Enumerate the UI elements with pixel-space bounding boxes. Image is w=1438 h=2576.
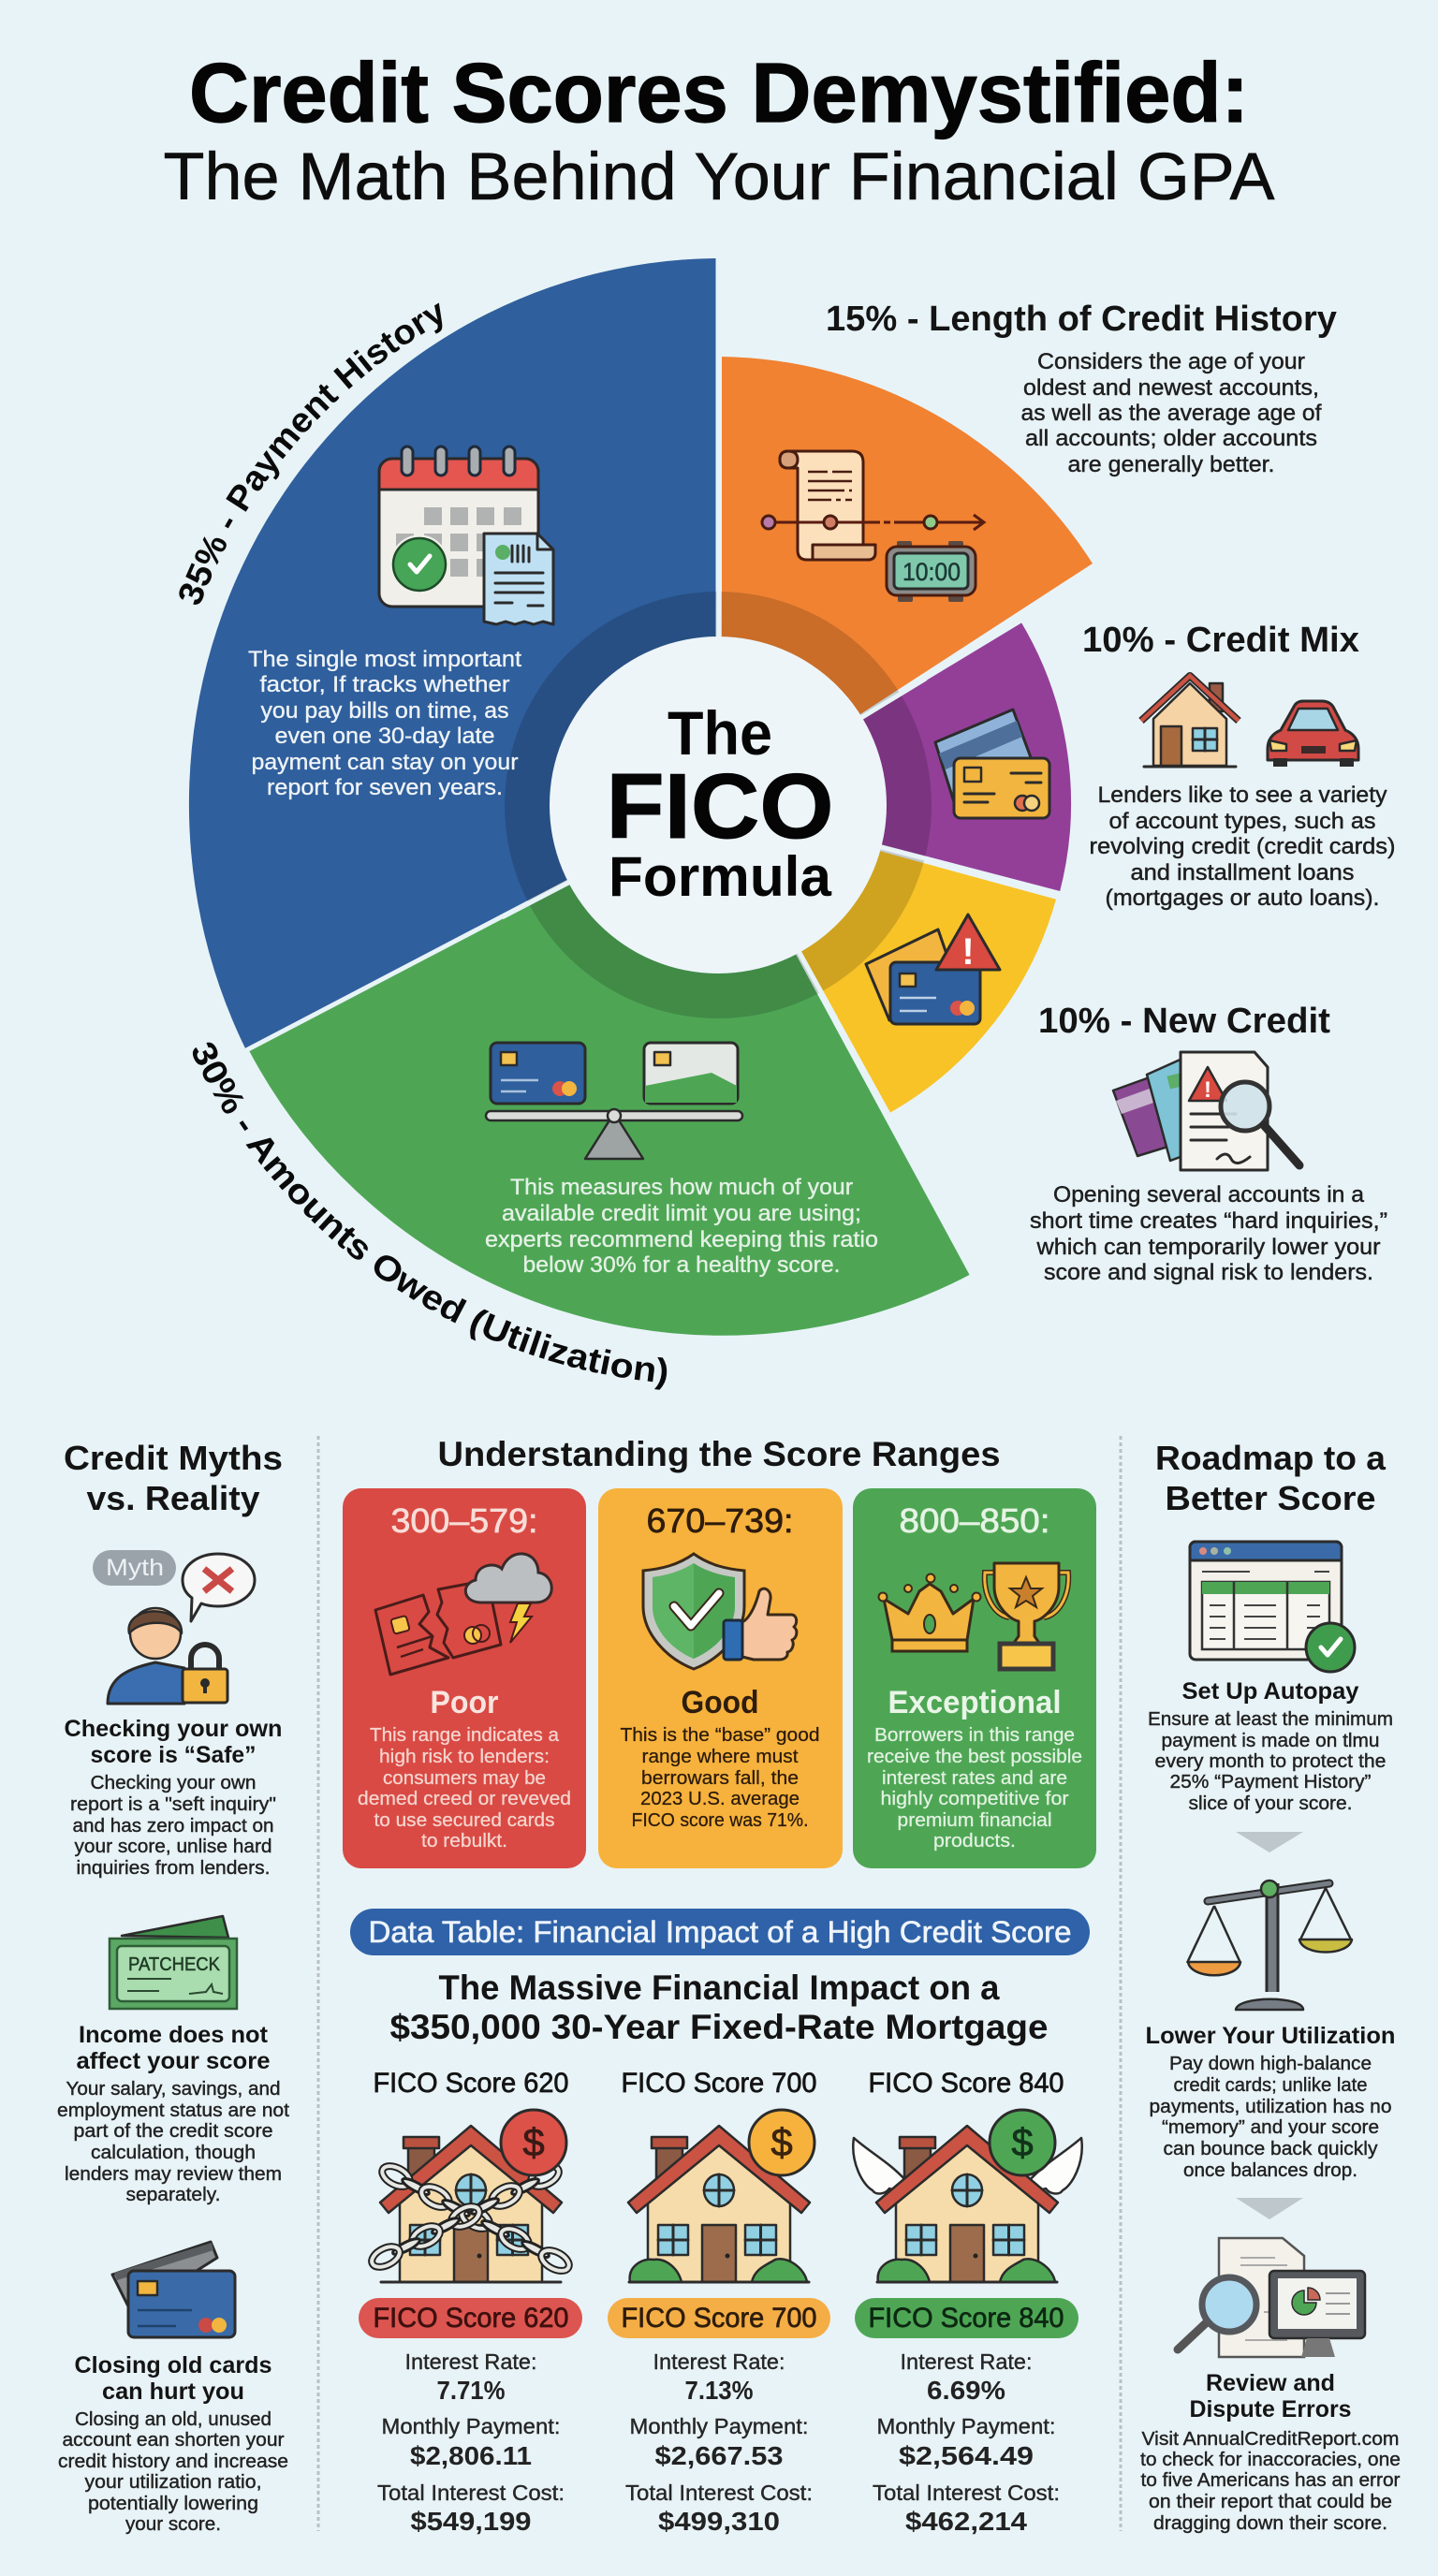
card: poor: consumers may be (383, 1768, 546, 1789)
heading (1155, 1439, 1387, 1517)
step 3: to five Americans has an error (1140, 2470, 1401, 2491)
panel: credit mix: (mortgages or auto loans). (1105, 886, 1380, 911)
pill (359, 2298, 582, 2338)
curved label: amounts owed: 30% - Amounts Owed (Utilization) (193, 1043, 667, 1390)
card: good: This is the “base” good (620, 1725, 820, 1746)
icon: scroll timeline clock: 10:00 (902, 558, 961, 586)
myth 2: lenders may review them (65, 2164, 282, 2185)
step 2: Lower Your Utilization (1146, 2023, 1395, 2049)
banner: data table: Data Table: Financial Impact of a High Credit Score (369, 1915, 1071, 1949)
icon: house with wings: $ (1011, 2120, 1034, 2164)
divider left (316, 1436, 320, 2531)
icon: credit cards purple (935, 710, 1049, 818)
pill (608, 2298, 830, 2338)
icon: documents with magnifier: ! (1204, 1077, 1211, 1103)
icon: myth person lock (93, 1550, 255, 1704)
panel: credit myths (57, 1439, 289, 2535)
center circle: FICO (607, 754, 833, 857)
card: good: berrowars fall, the (641, 1768, 799, 1789)
myth 3: potentially lowering (88, 2494, 258, 2514)
panel: credit mix: of account types, such as (1108, 809, 1376, 834)
myth 2: part of the credit score (73, 2121, 273, 2142)
card: poor: demed creed or reveved (358, 1789, 571, 1809)
metrics: Total Interest Cost: (873, 2481, 1060, 2505)
myth 3: your score. (125, 2514, 221, 2535)
column: FICO 620: FICO Score 620 (373, 2068, 569, 2099)
metrics: 6.69% (927, 2376, 1005, 2405)
metrics: 7.71% (436, 2376, 506, 2405)
card: poor: This range indicates a (370, 1725, 560, 1746)
card: exceptional: Borrowers in this range (874, 1725, 1075, 1746)
card: poor: to use secured cards (374, 1810, 554, 1831)
pill: FICO Score 700 (622, 2303, 816, 2334)
text: amounts owed: available credit limit you are using; (502, 1201, 861, 1226)
myth 1: and has zero impact on (73, 1816, 273, 1837)
title (163, 47, 1275, 214)
card: good: Good (682, 1685, 758, 1720)
inner dark ring (505, 592, 932, 1018)
panel: credit mix: 10% - Credit Mix (1082, 621, 1359, 660)
myth 1: Checking your own (90, 1773, 257, 1793)
icon: paycheck: PATCHECK (128, 1954, 221, 1975)
pill (855, 2298, 1078, 2338)
icon: house with coin: $ (770, 2120, 793, 2164)
step 2: once balances drop. (1183, 2160, 1357, 2181)
card: exceptional: interest rates and are (882, 1768, 1067, 1789)
icon: review documents (1178, 2238, 1365, 2357)
text: amounts owed: This measures how much of your (510, 1175, 853, 1200)
icon: documents with magnifier (1113, 1052, 1299, 1170)
card: good: range where must (642, 1747, 799, 1767)
metrics: Monthly Payment: (876, 2414, 1056, 2438)
heading: mortgage impact: $350,000 30-Year Fixed-Rate Mortgage (389, 2008, 1049, 2046)
metrics: Interest Rate: (901, 2349, 1032, 2374)
column: FICO 700 (608, 2068, 830, 2536)
panel: length of credit history: 15% - Length of Credit History (826, 300, 1337, 339)
heading: Credit Myths (64, 1439, 283, 1477)
icon: new credit cards warning (866, 915, 1000, 1024)
card: exceptional: 800–850: (899, 1501, 1050, 1540)
icon: scale with cards (486, 1043, 742, 1159)
myth 2 (57, 2022, 289, 2205)
myth 3: can hurt you (102, 2378, 244, 2405)
pill: FICO Score 620 (373, 2303, 569, 2334)
chart: FICO formula pie (179, 258, 1093, 1390)
myth 2: Your salary, savings, and (66, 2079, 281, 2100)
card: poor: Poor (431, 1685, 498, 1720)
panel: score ranges heading: Understanding the Score Ranges (438, 1435, 1000, 1473)
myth 2: Income does not (79, 2022, 269, 2048)
card: exceptional: premium financial (897, 1810, 1052, 1831)
curved label: payment history: 35% - Payment History (179, 303, 442, 605)
step 2: Pay down high-balance (1169, 2054, 1372, 2074)
center circle: The (668, 698, 772, 768)
heading: mortgage impact: The Massive Financial Impact on a (438, 1969, 1000, 2007)
metrics (377, 2349, 565, 2536)
column: FICO 700: FICO Score 700 (622, 2068, 816, 2099)
myth 3: your utilization ratio, (84, 2472, 262, 2493)
segment: credit mix (717, 620, 1074, 894)
icon: credit cards (112, 2242, 235, 2337)
step 2: “memory” and your score (1162, 2117, 1379, 2138)
myth 3: credit history and increase (58, 2452, 288, 2472)
text: payment history: payment can stay on your (251, 750, 519, 775)
panel: credit mix: revolving credit (credit cards) (1090, 834, 1395, 859)
myth 3: Closing an old, unused (75, 2409, 271, 2430)
myth 2: affect your score (77, 2048, 271, 2074)
text: payment history: The single most important (248, 647, 521, 672)
myth 1 (64, 1716, 283, 1879)
icon: shield and thumbs up (643, 1554, 797, 1669)
column: FICO 840 (853, 2068, 1082, 2536)
panel: length of credit history (826, 300, 1337, 477)
step 1: Ensure at least the minimum (1148, 1709, 1393, 1730)
icon: house with coin (628, 2110, 814, 2282)
card: poor: to rebulkt. (421, 1831, 507, 1852)
panel: length of credit history: Considers the age of your (1037, 349, 1305, 374)
heading (64, 1439, 283, 1517)
panel: credit mix: Lenders like to see a variety (1097, 783, 1387, 808)
segment: length of history (722, 357, 1093, 804)
heading: vs. Reality (86, 1479, 260, 1517)
metrics: $2,806.11 (410, 2441, 532, 2470)
text: amounts owed (485, 1175, 878, 1278)
panel: length of credit history: are generally better. (1067, 452, 1275, 477)
title: The Math Behind Your Financial GPA (163, 140, 1275, 214)
text: payment history: you pay bills on time, as (260, 698, 509, 724)
step 1: Set Up Autopay (1181, 1678, 1359, 1705)
arrow (1236, 2198, 1303, 2219)
icon: crown and trophy (878, 1563, 1068, 1669)
myth 3 (58, 2352, 288, 2535)
metrics (625, 2349, 813, 2536)
panel: new credit (1030, 1002, 1387, 1285)
icon: house (1141, 676, 1239, 767)
panel: length of credit history: all accounts; older accounts (1025, 426, 1317, 451)
metrics: 7.13% (685, 2376, 754, 2405)
card: poor: high risk to lenders: (379, 1747, 550, 1767)
icon: myth person lock: Myth (106, 1555, 164, 1581)
card: good (598, 1488, 843, 1868)
step 2: can bounce back quickly (1163, 2139, 1378, 2159)
step 1: slice of your score. (1189, 1793, 1352, 1814)
column: FICO 620 (359, 2068, 582, 2536)
step 1: every month to protect the (1155, 1751, 1386, 1772)
icon: broken card and storm (375, 1554, 551, 1675)
text: payment history: factor, If tracks whether (260, 672, 509, 697)
card: good: 2023 U.S. average (640, 1789, 800, 1809)
card: exceptional: Exceptional (888, 1685, 1062, 1720)
text: amounts owed: experts recommend keeping this ratio (485, 1227, 878, 1252)
card: exceptional (853, 1488, 1096, 1868)
icon: house with wings (853, 2110, 1082, 2282)
metrics: Total Interest Cost: (625, 2481, 813, 2505)
panel: new credit: which can temporarily lower your (1035, 1235, 1381, 1260)
panel: roadmap (1140, 1439, 1401, 2534)
text: payment history (248, 647, 521, 800)
panel: length of credit history: oldest and newest accounts, (1023, 375, 1319, 401)
card: exceptional: receive the best possible (867, 1747, 1082, 1767)
metrics: $2,667.53 (655, 2441, 783, 2470)
myth 2: calculation, though (91, 2143, 256, 2163)
card: exceptional: products. (933, 1831, 1016, 1852)
icon: car (1268, 701, 1358, 767)
segment: new credit (717, 804, 1059, 1116)
icon: new credit cards warning: ! (961, 931, 975, 973)
step 2: payments, utilization has no (1150, 2097, 1391, 2117)
myth 1: inquiries from lenders. (77, 1858, 270, 1879)
metrics: $549,199 (410, 2507, 532, 2536)
panel: credit mix: and installment loans (1131, 860, 1354, 886)
metrics: Monthly Payment: (629, 2414, 809, 2438)
metrics: Total Interest Cost: (377, 2481, 565, 2505)
step 1: payment is made on tlmu (1161, 1731, 1380, 1751)
step 3: on their report that could be (1149, 2492, 1392, 2512)
icon: chained house (369, 2110, 572, 2282)
icon: chained house: $ (522, 2120, 545, 2164)
panel: new credit: Opening several accounts in a (1053, 1182, 1365, 1208)
myth 3: account ean shorten your (62, 2430, 285, 2451)
myth 2: employment status are not (57, 2100, 289, 2121)
heading: Better Score (1165, 1479, 1376, 1517)
metrics: Interest Rate: (653, 2349, 785, 2374)
metrics: $2,564.49 (899, 2441, 1034, 2470)
step 2 (1146, 2023, 1395, 2181)
icon: scroll timeline clock (762, 451, 984, 602)
myth 2: separately. (125, 2185, 221, 2205)
myth 1: report is a "seft inquiry" (70, 1794, 276, 1815)
banner: data table (350, 1909, 1090, 1955)
metrics: $462,214 (905, 2507, 1027, 2536)
step 3: to check for inaccoracies, one (1140, 2450, 1401, 2470)
myth 1: score is “Safe” (90, 1742, 257, 1768)
step 3: Visit AnnualCreditReport.com (1142, 2429, 1399, 2450)
icon: paycheck (110, 1916, 237, 2009)
card: poor (343, 1488, 586, 1868)
step 1 (1148, 1678, 1393, 1814)
metrics: $499,310 (658, 2507, 780, 2536)
title: Credit Scores Demystified: (189, 47, 1249, 140)
card: good: FICO score was 71%. (631, 1810, 809, 1831)
text: payment history: even one 30-day late (275, 724, 494, 749)
panel: length of credit history: as well as the average age of (1020, 401, 1322, 426)
heading: mortgage impact (389, 1969, 1049, 2046)
icon: autopay window (1190, 1542, 1355, 1672)
icon: calendar (379, 446, 553, 624)
pill: FICO Score 840 (869, 2303, 1064, 2334)
segment: amounts owed (246, 804, 973, 1338)
text: payment history: report for seven years. (267, 775, 503, 800)
arrow (1236, 1832, 1303, 1852)
myth 1: Checking your own (64, 1716, 283, 1742)
column: FICO 840: FICO Score 840 (869, 2068, 1064, 2099)
panel: new credit: score and signal risk to lenders. (1044, 1260, 1373, 1285)
panel: credit mix (1082, 621, 1395, 911)
card: good: 670–739: (646, 1501, 794, 1540)
step 3: dragging down their score. (1153, 2513, 1387, 2534)
card: poor: 300–579: (391, 1501, 537, 1540)
step 3: Review and (1206, 2370, 1335, 2396)
panel: new credit: short time creates “hard inquiries,” (1030, 1208, 1387, 1234)
myth 3: Closing old cards (75, 2352, 271, 2378)
divider right (1120, 1436, 1122, 2531)
metrics: Monthly Payment: (382, 2414, 560, 2438)
step 1: 25% “Payment History” (1170, 1772, 1371, 1793)
center circle (550, 637, 887, 973)
heading: Roadmap to a (1155, 1439, 1387, 1477)
center circle: Formula (609, 845, 832, 908)
step 3: Dispute Errors (1189, 2396, 1352, 2422)
segment: payment history (189, 258, 715, 1050)
card: exceptional: highly competitive for (880, 1789, 1069, 1809)
text: amounts owed: below 30% for a healthy score. (522, 1252, 841, 1278)
icon: balance scale (1187, 1881, 1352, 2010)
panel: new credit: 10% - New Credit (1038, 1002, 1330, 1041)
step 3 (1140, 2370, 1401, 2534)
step 2: credit cards; unlike late (1174, 2075, 1367, 2096)
myth 1: your score, unlise hard (75, 1837, 271, 1857)
metrics: Interest Rate: (404, 2349, 537, 2374)
metrics (873, 2349, 1060, 2536)
